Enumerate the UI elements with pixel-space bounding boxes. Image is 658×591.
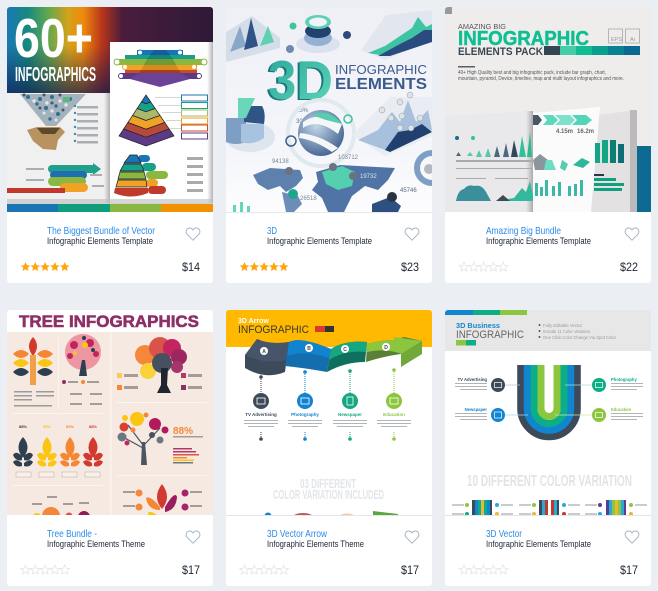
rating stars (empty) — [459, 262, 508, 271]
product image: amazing big infographic elements pack: 4.15m — [556, 129, 573, 135]
title: Tree Bundle - — [47, 529, 97, 540]
subtitle: Infographic Elements Template — [267, 236, 372, 246]
product image: amazing big infographic elements pack: EPS — [611, 37, 622, 43]
product image: 3D infographic elements: 25% — [296, 108, 309, 114]
icon: favourite heart — [186, 531, 200, 543]
product image: 3D business infographic: TV Advertising — [458, 377, 487, 382]
subtitle: Infographic Elements Template — [486, 236, 591, 246]
card: The Biggest Bundle of Vector — [7, 7, 213, 283]
product image: 3D business infographic — [445, 310, 651, 516]
rating stars (empty) — [21, 565, 70, 574]
subtitle: Infographic Elements Theme — [267, 539, 364, 549]
product image: 3D arrow infographic: C — [343, 347, 347, 353]
rating stars — [240, 262, 288, 271]
subtitle: Infographic Elements Template — [486, 539, 591, 549]
product image: 3D business infographic: Photography — [611, 377, 637, 382]
icon: favourite heart — [186, 228, 200, 240]
product image: amazing big infographic elements pack: Ai — [630, 37, 635, 43]
rating stars (empty) — [240, 565, 288, 574]
icon: favourite heart — [625, 228, 639, 240]
product image: 3D infographic elements: 26518 — [300, 196, 317, 202]
product image: tree infographics: 88% — [173, 426, 193, 437]
card: 3D Vector — [445, 310, 651, 586]
subtitle: Infographic Elements Theme — [47, 539, 145, 549]
price: $22 — [620, 260, 638, 274]
product image: 3D arrow infographic: 3D Arrow — [238, 318, 269, 325]
title: The Biggest Bundle of Vector — [47, 226, 156, 237]
product image: 3D arrow infographic: D — [384, 345, 388, 351]
price: $23 — [401, 260, 419, 274]
title: 3D Vector — [486, 529, 523, 540]
product image: amazing big infographic elements pack: 16.2m — [577, 129, 594, 135]
product image: tree infographics: 55% — [43, 424, 51, 429]
product image: 3D business infographic: 3D Business — [456, 323, 500, 330]
product image: 3D infographic elements: 30% — [296, 119, 309, 125]
product image: 60+ infographics: INFOGRAPHICS — [15, 64, 96, 86]
price: $17 — [620, 563, 638, 577]
product image: 3D arrow infographic: INFOGRAPHIC — [238, 324, 309, 336]
product image: 3D business infographic: Newspaper — [465, 407, 487, 412]
title: Amazing Big Bundle — [486, 226, 561, 237]
world map — [253, 163, 401, 212]
card: 3D — [225, 7, 447, 283]
icon: favourite heart — [405, 531, 419, 543]
product image: 3D infographic elements: ELEMENTS — [335, 76, 427, 93]
product image: 3D infographic elements: INFOGRAPHIC — [335, 62, 427, 77]
product image: 3D arrow infographic: Education — [383, 412, 405, 417]
product image: 60+ infographics — [7, 7, 213, 212]
product image: 3D infographic elements: 103712 — [338, 155, 359, 161]
product image: tree infographics: 52% — [66, 424, 74, 429]
product image: 3D arrow infographic: 03 DIFFERENT — [300, 476, 356, 491]
subtitle: Infographic Elements Template — [47, 236, 153, 246]
icon: favourite heart — [405, 228, 419, 240]
card: Amazing Big Bundle — [445, 7, 651, 283]
product image: amazing big infographic elements pack: ELEMENTS PACK — [458, 46, 543, 58]
product image: amazing big infographic elements pack: INFOGRAPHIC — [458, 28, 589, 50]
product image: amazing big infographic elements pack: AMAZING BIG — [458, 22, 506, 31]
product image: amazing big infographic elements pack — [445, 7, 651, 212]
title: 3D Vector Arrow — [267, 529, 328, 540]
product image: 3D arrow infographic — [226, 310, 432, 521]
price: $14 — [182, 260, 200, 274]
product image: 3D infographic elements: 94138 — [272, 159, 289, 165]
title: 3D — [267, 226, 277, 237]
product image: 3D arrow infographic: A — [262, 349, 266, 355]
rating stars (empty) — [459, 565, 508, 574]
product image: tree infographics — [7, 310, 213, 525]
product image: tree infographics: 88% — [19, 424, 27, 429]
product image: 3D business infographic: Education — [611, 407, 632, 412]
product image: 3D arrow infographic: B — [307, 346, 311, 352]
card: 3D Vector Arrow — [226, 310, 432, 586]
product image: amazing big infographic elements pack: 40+ High Quality best and big infographic pack, include bar graph, chart, — [458, 70, 606, 76]
product image: 3D infographic elements: 19732 — [360, 174, 377, 180]
product image: 3D business infographic: INFOGRAPHIC — [456, 329, 524, 341]
product image: 3D business infographic: Fully Editable Vector — [543, 323, 582, 328]
product image: 60+ infographics: 60+ — [14, 7, 93, 69]
product image: 3D business infographic: One Click Color Change Via Spot Color — [543, 335, 616, 340]
price: $17 — [401, 563, 419, 577]
product image: 3D infographic elements — [225, 7, 447, 212]
product image: amazing big infographic elements pack: mountain, pyramid, Device, timeline, map and multi layout infographics and more. — [458, 76, 624, 82]
icon: favourite heart — [625, 531, 639, 543]
product image: 3D arrow infographic: Newspaper — [338, 412, 362, 417]
price: $17 — [182, 563, 200, 577]
product image: 3D business infographic: Include 11 Color Variation — [543, 329, 590, 334]
product image: 3D arrow infographic: COLOR VARIATION INCLUDED — [273, 487, 384, 502]
card: Tree Bundle — [7, 310, 213, 586]
product image: 3D arrow infographic: Photography — [291, 412, 319, 417]
rating stars — [21, 262, 70, 271]
product image: 3D arrow infographic: TV Advertising — [245, 412, 277, 417]
product image: 3D infographic elements: 45746 — [400, 188, 417, 194]
product image: 3D infographic elements: 3D — [268, 49, 333, 111]
product image: tree infographics: 88% — [89, 424, 97, 429]
product image: tree infographics: TREE INFOGRAPHICS — [19, 312, 199, 331]
